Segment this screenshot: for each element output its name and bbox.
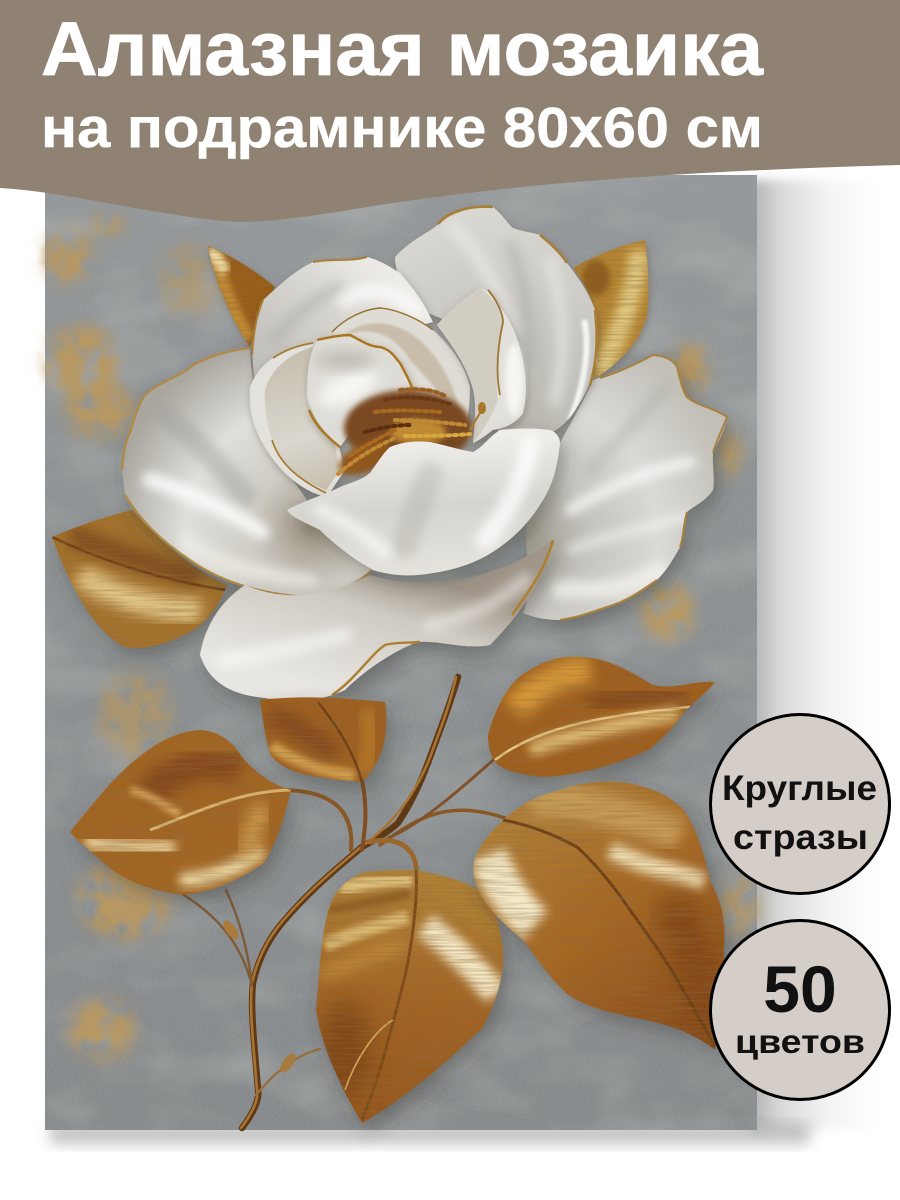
petal: right large bbox=[523, 355, 727, 620]
canvas side and bottom shadow bbox=[50, 180, 880, 1144]
leaf: small upper right bbox=[570, 236, 652, 384]
gold edge: right petal bbox=[560, 355, 727, 620]
header banner bbox=[0, 0, 900, 222]
stamens: flower center bbox=[334, 389, 486, 483]
petal: front bbox=[287, 428, 560, 575]
badge: 50 colours bbox=[710, 920, 890, 1100]
flower: white bloom bbox=[122, 207, 727, 701]
badge: round rhinestones: стразы bbox=[733, 818, 868, 857]
leaf: center under flower bbox=[255, 695, 390, 787]
leaf: left middle bbox=[45, 505, 235, 655]
petal: center left bbox=[307, 335, 413, 447]
gold edge: left petal bbox=[122, 348, 372, 597]
leaf: upper right bbox=[485, 650, 720, 780]
illustration: stems bbox=[184, 677, 510, 1128]
gold edge: top left petal bbox=[252, 257, 367, 355]
subtitle: на подрамнике 80х60 см bbox=[41, 96, 763, 160]
gold patches on the background bbox=[44, 214, 758, 1060]
petal: middle back bbox=[332, 308, 470, 430]
petal: left large bbox=[122, 348, 372, 597]
panel: painting background bbox=[44, 175, 758, 1130]
petal: bottom wide bbox=[200, 540, 553, 701]
badge: round rhinestones bbox=[710, 714, 890, 894]
leaf: small upper left bbox=[208, 246, 276, 348]
gold edge: bottom petal bbox=[332, 540, 553, 695]
leaf: left lower bbox=[65, 725, 295, 900]
badge: 50 colours: цветов bbox=[735, 1023, 865, 1060]
badge: 50 colours: 50 bbox=[763, 952, 837, 1026]
leaf: bottom right bbox=[468, 778, 728, 1053]
petal: outer left inner bbox=[250, 343, 345, 497]
petal: right inner bbox=[437, 288, 526, 443]
petal: top right bbox=[395, 207, 597, 440]
badge: round rhinestones: Круглые bbox=[722, 769, 877, 808]
gold edge: top right petal bbox=[438, 207, 597, 385]
title: Алмазная мозаика bbox=[41, 7, 764, 92]
petal: top left bbox=[249, 256, 435, 384]
leaf: bottom center bbox=[310, 865, 510, 1127]
